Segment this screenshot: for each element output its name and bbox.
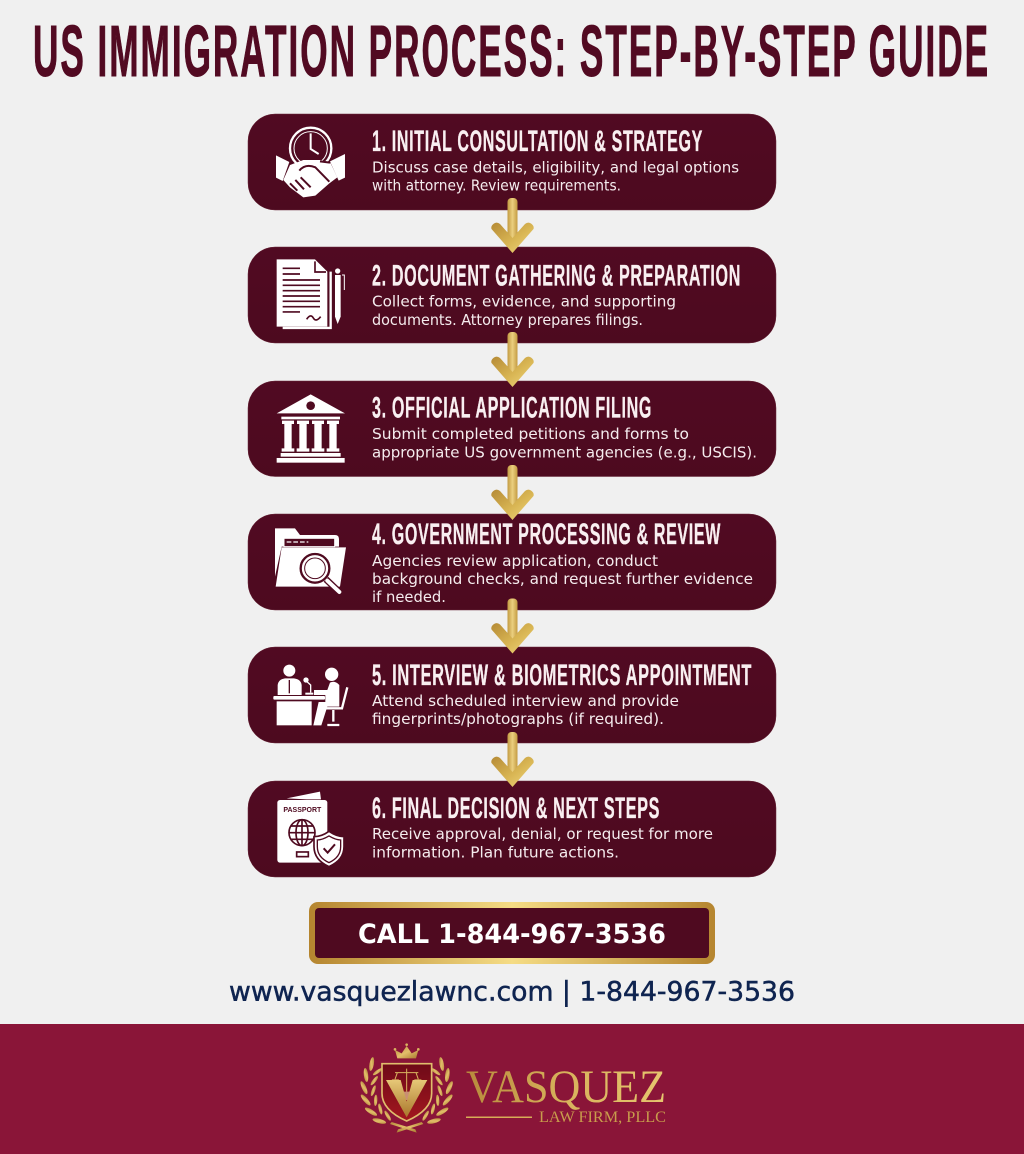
text: step 2 description: Collect forms, evidence, and supporting: [372, 292, 676, 310]
text: step 6 description: [372, 825, 713, 862]
heading: step 3: 3. OFFICIAL APPLICATION FILING: [372, 392, 652, 424]
icon: clock and handshake: [276, 128, 345, 197]
heading: step 6: 6. FINAL DECISION & NEXT STEPS: [372, 792, 660, 825]
arrow: step 5 to 6: [491, 732, 534, 787]
text: step 4 description: background checks, and request further evidence: [372, 570, 753, 588]
panel: step 5 interview and biometrics: [248, 647, 776, 743]
call to action button: [309, 902, 715, 964]
text: step 2 description: documents. Attorney prepares filings.: [372, 311, 643, 329]
text: step 1 description: with attorney. Review requirements.: [372, 176, 621, 194]
text: step 4 description: if needed.: [372, 588, 446, 606]
text: step 5 description: Attend scheduled interview and provide: [372, 692, 679, 710]
arrow: step 4 to 5: [491, 598, 534, 654]
heading: step 1: 1. INITIAL CONSULTATION & STRATEGY: [372, 125, 703, 158]
heading: step 4: 4. GOVERNMENT PROCESSING & REVIEW: [372, 518, 721, 551]
call to action button: CALL 1-844-967-3536: [358, 919, 666, 950]
icon: folder with magnifier: [275, 528, 346, 593]
text: step 6 description: Receive approval, denial, or request for more: [372, 825, 713, 843]
text: step 5 description: [372, 692, 679, 728]
text: step 3 description: Submit completed petitions and forms to: [372, 425, 689, 443]
icon: government building: [277, 394, 345, 463]
icon: crest: [359, 1043, 454, 1133]
wordmark: VASQUEZ: [466, 1061, 666, 1113]
panel: step 2 document gathering: [248, 247, 776, 343]
text: step 4 description: Agencies review application, conduct: [372, 552, 658, 570]
text: step 4 description: [372, 552, 753, 606]
arrow: step 1 to 2: [491, 198, 534, 253]
text: step 1 description: Discuss case details, eligibility, and legal options: [372, 158, 739, 176]
text: step 3 description: [372, 425, 757, 462]
text: step 1 description: [372, 158, 739, 194]
panel: step 1 initial consultation: [248, 114, 776, 210]
text: step 5 description: fingerprints/photographs (if required).: [372, 710, 664, 728]
icon: interview at desk: [273, 665, 347, 725]
icon: passport and shield: [277, 792, 344, 867]
panel: step 3 application filing: [248, 381, 776, 476]
text: step 6 description: information. Plan future actions.: [372, 844, 619, 862]
arrow: step 3 to 4: [491, 465, 534, 520]
arrow: step 2 to 3: [491, 332, 534, 387]
panel: step 4 government processing: [248, 514, 776, 610]
logo: Vasquez Law Firm: [359, 1043, 666, 1133]
footer band: [0, 1024, 1024, 1154]
icon: passport and shield: PASSPORT: [283, 807, 322, 814]
contact line: www.vasquezlawnc.com | 1-844-967-3536: [229, 976, 795, 1008]
panel: step 6 final decision: [248, 781, 776, 877]
text: step 2 description: [372, 292, 676, 329]
icon: document and pen: [277, 259, 344, 328]
tagline: LAW FIRM, PLLC: [539, 1109, 666, 1126]
text: step 3 description: appropriate US government agencies (e.g., USCIS).: [372, 444, 757, 462]
